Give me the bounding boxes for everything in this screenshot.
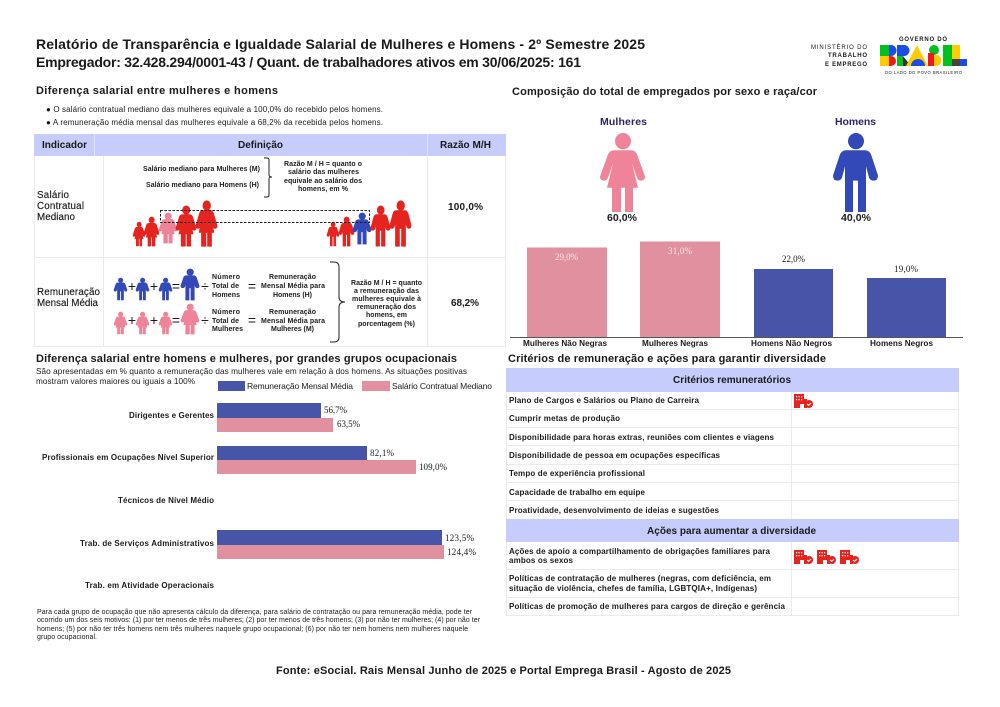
title: Relatório de Transparência e Igualdade Salarial de Mulheres e Homens - 2º Semestre 2025 <box>36 36 645 52</box>
legend <box>218 381 492 391</box>
logo: Ministério do Trabalho e Emprego: TRABALHO <box>828 53 867 59</box>
formula: mulheres: + <box>150 312 158 328</box>
large brace <box>330 262 345 342</box>
action rows <box>509 547 786 611</box>
criteria rows: Cumprir metas de produção <box>509 414 620 423</box>
formula: mulheres: + <box>128 312 136 328</box>
bullet text: ● O salário contratual mediano das mulheres equivale a 100,0% do recebido pelos homens. <box>46 105 383 114</box>
group: dirigentes e gerentes <box>129 403 360 432</box>
formula: homens: Homens <box>212 292 240 299</box>
panel: homens <box>833 116 878 224</box>
group: dirigentes e gerentes: 56,7% <box>324 405 348 415</box>
formula: mulheres <box>114 304 325 334</box>
heading: diferença por grupos ocupacionais: Diferença salarial entre homens e mulheres, por grandes grupos ocupacionais <box>36 353 457 365</box>
group: profissionais nível superior: 82,1% <box>370 448 394 458</box>
criteria rows: Proatividade, desenvolvimento de ideias e sugestões <box>509 506 720 515</box>
definition text: salário mediano <box>143 166 260 189</box>
logo: Ministério do Trabalho e Emprego <box>811 44 867 68</box>
subtitle: mostram valores maiores ou iguais a 100% <box>36 377 195 386</box>
group: profissionais nível superior <box>42 446 448 474</box>
footnote <box>37 609 481 641</box>
action rows: situação de violência, chefes de família, LGBTQIA+, Indígenas) <box>509 584 757 593</box>
formula: homens: = <box>172 278 180 294</box>
ratio explanation text: salário das mulheres <box>288 169 359 176</box>
criteria rows: Plano de Cargos e Salários ou Plano de Carreira <box>509 396 700 405</box>
group: serviços administrativos: 124,4% <box>447 547 476 557</box>
bar chart: composição por raça <box>510 241 963 348</box>
ratio explanation text: a remuneração das <box>354 288 419 295</box>
formula: homens: Homens (H) <box>273 292 312 299</box>
criteria rows: Disponibilidade de pessoa em ocupações específicas <box>509 451 721 460</box>
axis labels: Homens Negros <box>870 339 933 348</box>
formula: homens: Número <box>212 274 240 281</box>
row label: remuneração mensal média <box>37 287 101 309</box>
logo: Ministério do Trabalho e Emprego: MINISTÉRIO DO <box>811 44 867 51</box>
formula: homens: + <box>150 278 158 294</box>
axis labels <box>523 339 933 348</box>
bar: homens negros <box>867 264 946 337</box>
ratio explanation text: homens, em % <box>298 186 349 193</box>
icon: empresa <box>794 394 813 408</box>
footnote: ocorrido um dos seis motivos: (1) por ter menos de três mulheres; (2) por ter menos de três homens; (3) por não ter mulheres; (4) por não ter <box>37 617 481 624</box>
row label: salário contratual mediano <box>37 190 84 223</box>
panel: homens: 40,0% <box>841 212 872 224</box>
heading: critérios e ações: Critérios de remuneração e ações para garantir diversidade <box>508 353 826 365</box>
row label: salário contratual mediano: Salário <box>37 190 70 201</box>
heading: composição: Composição do total de empregados por sexo e raça/cor <box>512 86 818 98</box>
group: dirigentes e gerentes: 63,5% <box>337 419 360 429</box>
formula: mulheres: Mulheres (M) <box>271 326 314 333</box>
section header: critérios remuneratórios: Critérios remuneratórios <box>673 375 791 386</box>
ratio explanation text: porcentagem (%) <box>358 321 415 328</box>
dashed median box <box>160 210 370 222</box>
bar chart: grupos ocupacionais <box>42 403 476 590</box>
group: técnicos de nível médio: Técnicos de Nível Médio <box>118 496 214 505</box>
ratio explanation text: remuneração dos <box>357 304 416 311</box>
definition text: salário mediano: Salário mediano para Homens (H) <box>146 182 259 189</box>
table header: Definição <box>238 140 283 151</box>
value: 100,0%: 100,0% <box>448 202 483 213</box>
panel: critérios e ações table <box>506 368 959 616</box>
icon: homens em fila <box>327 201 411 246</box>
panel: homens: Homens <box>835 116 876 128</box>
formula: mulheres: Mensal Média para <box>261 318 325 325</box>
axis labels: Homens Não Negros <box>751 339 832 348</box>
brace <box>264 158 272 197</box>
criteria rows: Disponibilidade para horas extras, reuniões com clientes e viagens <box>509 433 775 442</box>
group: profissionais nível superior: Profissionais em Ocupações Nível Superior <box>42 453 214 462</box>
formula: mulheres: ÷ <box>201 312 209 328</box>
group: atividade operacionais: Trab. em Atividade Operacionais <box>85 581 215 590</box>
row label: salário contratual mediano: Contratual <box>37 201 84 212</box>
table header: Razão M/H <box>440 140 491 151</box>
footnote: grupo ocupacional. <box>37 634 97 641</box>
ratio explanation text <box>284 161 362 193</box>
formula: homens: Remuneração <box>269 274 316 281</box>
legend: Salário Contratual Mediano <box>392 381 492 391</box>
panel: mulheres: 60,0% <box>607 212 638 224</box>
ratio explanation text: Razão M / H = quanto o <box>284 161 362 168</box>
ratio explanation text: homens, em <box>366 312 407 319</box>
subtitle: São apresentadas em % quanto a remuneração das mulheres vale em relação à dos homens. As situações positivas <box>36 367 467 376</box>
logo: Ministério do Trabalho e Emprego: E EMPREGO <box>825 62 867 68</box>
table header: Indicador <box>42 140 87 151</box>
subtitle <box>36 367 467 386</box>
formula: mulheres: = <box>248 312 256 328</box>
formula: mulheres: Mulheres <box>212 326 243 333</box>
logo: Governo do Brasil: DO LADO DO POVO BRASILEIRO <box>885 70 963 75</box>
formula: homens: Mensal Média para <box>261 283 325 290</box>
formula: mulheres: Remuneração <box>269 309 316 316</box>
source footer: Fonte: eSocial. Rais Mensal Junho de 2025 e Portal Emprega Brasil - Agosto de 2025 <box>276 665 731 677</box>
bar: mulheres negras: 31,0% <box>668 246 692 256</box>
ratio explanation text <box>351 280 422 328</box>
definition text: salário mediano: Salário mediano para Mulheres (M) <box>143 166 260 173</box>
heading: diferença salarial: Diferença salarial entre mulheres e homens <box>36 85 278 97</box>
ratio explanation text: Razão M / H = quanto <box>351 280 422 287</box>
panel: mulheres <box>600 116 647 224</box>
action rows: Ações de apoio a compartilhamento de obrigações familiares para <box>509 547 771 556</box>
section header: ações: Ações para aumentar a diversidade <box>647 526 816 537</box>
logo: Governo do Brasil <box>880 37 967 75</box>
formula: mulheres: Total de <box>212 318 239 325</box>
group: serviços administrativos <box>80 530 476 559</box>
axis labels: Mulheres Não Negras <box>523 339 607 348</box>
ratio explanation text: mulheres equivale à <box>352 296 421 303</box>
table header <box>34 134 506 156</box>
formula: mulheres: Número <box>212 309 240 316</box>
bullet text <box>46 105 383 127</box>
bullet text: ● A remuneração média mensal das mulheres equivale a 68,2% da recebida pelos homens. <box>46 118 383 127</box>
icons: empresas <box>794 550 859 564</box>
title <box>36 36 645 70</box>
group: dirigentes e gerentes: Dirigentes e Gerentes <box>129 411 215 420</box>
group: profissionais nível superior: 109,0% <box>419 462 448 472</box>
formula: homens: = <box>248 278 256 294</box>
row label: salário contratual mediano: Mediano <box>37 212 76 223</box>
formula: homens: Total de <box>212 283 239 290</box>
bar: homens não negros <box>754 254 833 337</box>
criteria rows: Capacidade de trabalho em equipe <box>509 488 646 497</box>
footnote: Para cada grupo de ocupação que não apresenta cálculo da diferença, para salário de contratação ou para remuneração média, pode ter <box>37 609 473 616</box>
bar: mulheres não negras <box>527 247 607 337</box>
group: serviços administrativos: Trab. de Serviços Administrativos <box>80 539 215 548</box>
panel: tabela de indicadores <box>34 134 506 347</box>
bar: mulheres negras <box>640 241 720 337</box>
panel: mulheres: Mulheres <box>600 116 647 128</box>
formula: mulheres: = <box>172 312 180 328</box>
logo: Governo do Brasil: GOVERNO DO <box>899 37 947 43</box>
formula: homens <box>114 269 325 300</box>
action rows: Políticas de promoção de mulheres para cargos de direção e gerência <box>509 602 786 611</box>
title: Empregador: 32.428.294/0001-43 / Quant. de trabalhadores ativos em 30/06/2025: 161 <box>36 54 581 70</box>
footnote: homens; (5) por não ter três homens nem três mulheres naquele grupo ocupacional; (6) por não ter nem homens nem mulheres naquele <box>37 626 468 633</box>
bar: homens não negros: 22,0% <box>782 254 806 264</box>
value: 68,2%: 68,2% <box>451 298 479 309</box>
action rows: Políticas de contratação de mulheres (negras, com deficiência, em <box>509 574 771 583</box>
group: serviços administrativos: 123,5% <box>445 533 474 543</box>
action rows: ambos os sexos <box>509 556 574 565</box>
ratio explanation text: equivale ao salário dos <box>284 178 362 185</box>
bar: homens negros: 19,0% <box>894 264 918 274</box>
row label: remuneração mensal média: Mensal Média <box>37 298 99 309</box>
axis labels: Mulheres Negras <box>642 339 708 348</box>
bar: mulheres não negras: 29,0% <box>555 252 578 262</box>
formula: homens: ÷ <box>201 278 209 294</box>
criteria rows <box>509 396 775 515</box>
legend: Remuneração Mensal Média <box>247 381 353 391</box>
row label: remuneração mensal média: Remuneração <box>37 287 101 298</box>
icon: mulheres em fila <box>133 201 217 246</box>
criteria rows: Tempo de experiência profissional <box>509 469 645 478</box>
formula: homens: + <box>128 278 136 294</box>
